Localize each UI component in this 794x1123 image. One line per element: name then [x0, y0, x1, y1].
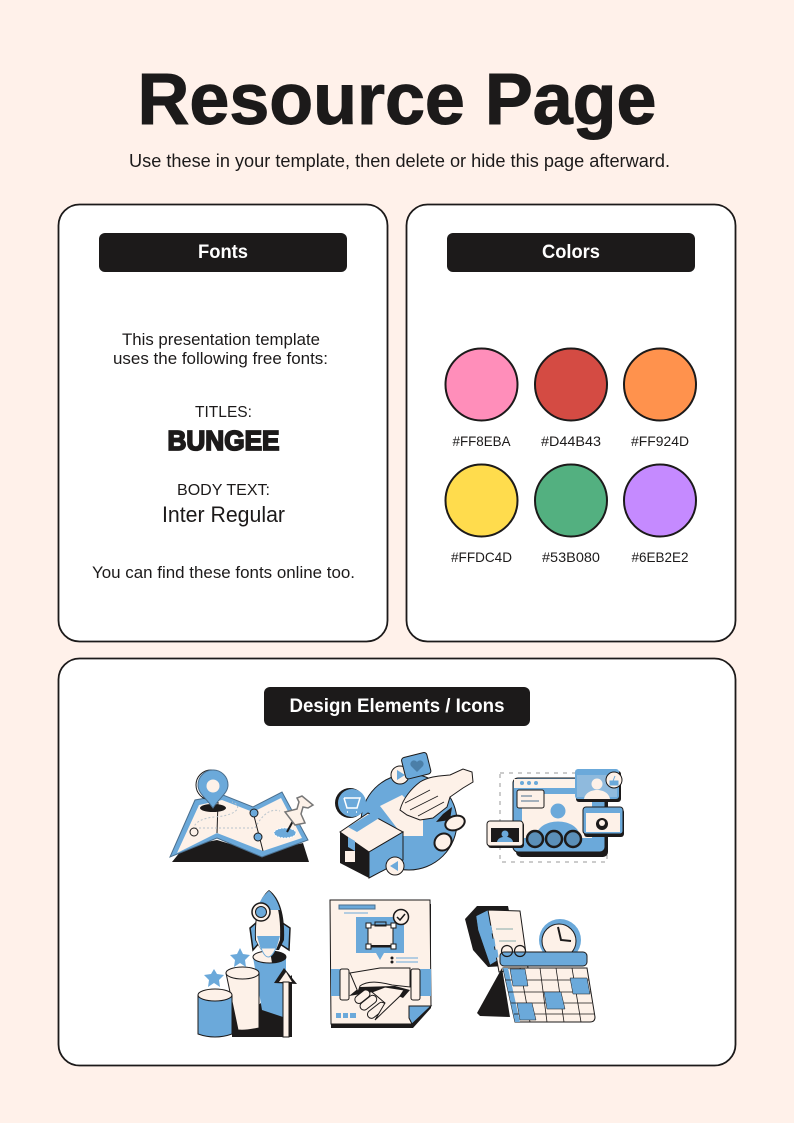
closing note: You can find these fonts online too.: [92, 563, 355, 582]
heading: fonts: [99, 233, 347, 272]
icon: video conference window: [487, 769, 624, 862]
swatch: orange: [624, 348, 696, 449]
icon: calendar, clock and checklist: [465, 906, 595, 1022]
panel: colors: [406, 204, 736, 642]
bungee font name: BUNGEE: [168, 425, 280, 456]
swatch: yellow: [446, 464, 518, 565]
icon: map with pins: [170, 770, 313, 862]
swatch: green: [535, 464, 607, 565]
heading: design elements: Design Elements / Icons: [290, 696, 504, 717]
swatch: orange: #FF924D: [631, 433, 689, 449]
panel: design elements: [58, 658, 736, 1066]
swatch: red: #D44B43: [541, 433, 601, 449]
intro text: This presentation template: [122, 330, 320, 349]
handshake fingers: [353, 987, 404, 1020]
swatch: red: [535, 348, 607, 449]
heading: design elements: [264, 687, 530, 726]
icon: handshake document: [330, 900, 431, 1028]
panel: fonts: [58, 204, 388, 642]
swatch: purple: #6EB2E2: [632, 549, 689, 565]
heading: fonts: Fonts: [198, 242, 248, 263]
avatar row: [527, 831, 581, 847]
swatch: purple: [624, 464, 696, 565]
subtitle: Use these in your template, then delete or hide this page afterward.: [129, 151, 670, 171]
heading: colors: Colors: [542, 242, 600, 263]
titles label: TITLES:: [195, 404, 252, 421]
title: Resource Page: [138, 60, 656, 140]
icon: rocket and growth bars: [198, 890, 297, 1037]
heading: colors: [447, 233, 695, 272]
intro text: [113, 330, 328, 368]
body text label: BODY TEXT:: [177, 482, 270, 499]
inter regular font name: Inter Regular: [162, 502, 285, 527]
icon: handshake and parcel: [335, 752, 473, 878]
swatch: green: #53B080: [542, 549, 600, 565]
swatch: yellow: #FFDC4D: [451, 549, 512, 565]
intro text: uses the following free fonts:: [113, 349, 328, 368]
swatch: pink: #FF8EBA: [452, 433, 511, 449]
swatch: pink: [446, 348, 518, 449]
